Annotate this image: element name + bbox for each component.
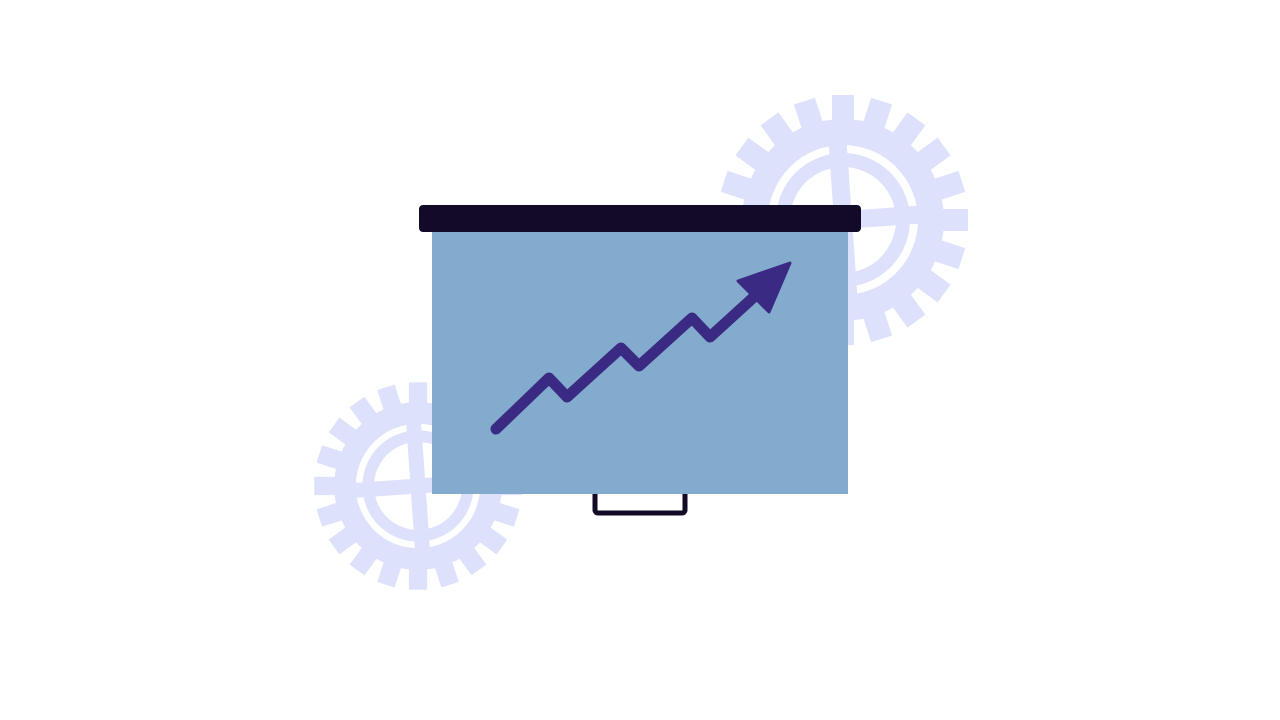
icon: gear bottom left	[314, 382, 522, 590]
presentation board	[419, 205, 861, 513]
board screen	[432, 228, 848, 494]
board top bar	[419, 205, 861, 232]
chart: rising arrow	[496, 263, 790, 429]
icon: gear top right	[718, 95, 968, 345]
board handle	[595, 480, 685, 513]
